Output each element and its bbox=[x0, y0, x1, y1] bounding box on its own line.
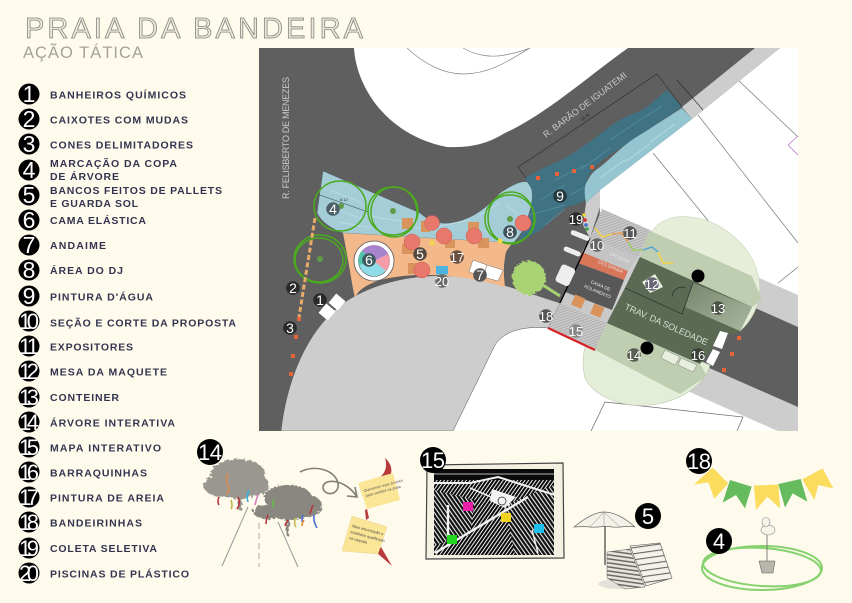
marker 10: 10 bbox=[590, 238, 604, 253]
legend item 6 bbox=[18, 207, 146, 233]
site plan bbox=[259, 48, 798, 440]
curved arrow bbox=[300, 468, 357, 497]
legend item 5: E GUARDA SOL bbox=[50, 198, 139, 210]
legend item 18: BANDEIRINHAS bbox=[50, 518, 142, 530]
section: calcada: CALÇADA bbox=[609, 251, 630, 264]
legend item 14: ÁRVORE INTERATIVA bbox=[50, 416, 175, 430]
tree trunks bbox=[640, 270, 704, 354]
diagonal sidewalk bbox=[682, 48, 780, 119]
map east blocks bbox=[505, 485, 554, 555]
legend item 16 bbox=[18, 460, 147, 485]
marker 3 bbox=[283, 320, 297, 336]
legend item 17: 17 bbox=[19, 485, 39, 510]
pallet stack bbox=[607, 549, 645, 589]
purple mark bbox=[788, 136, 798, 155]
marker 7 bbox=[473, 267, 487, 283]
badge 5: 5 bbox=[642, 504, 654, 529]
legend item 4: 4 bbox=[23, 157, 36, 183]
canopy over road bbox=[607, 257, 752, 364]
badge 15: 15 bbox=[421, 448, 445, 473]
lower lot outline bbox=[591, 402, 743, 431]
marker 6 bbox=[362, 252, 376, 268]
lot lines bbox=[653, 80, 798, 283]
marker 17: 17 bbox=[450, 250, 464, 265]
note 1 bbox=[358, 473, 403, 509]
legend item 17: PINTURA DE AREIA bbox=[50, 492, 164, 504]
chemical toilets bbox=[319, 294, 345, 320]
legend item 1: BANHEIROS QUÍMICOS bbox=[50, 88, 186, 102]
legend item 10: 10 bbox=[19, 309, 39, 334]
note 2: mobiliário qualificado bbox=[350, 530, 385, 543]
bunting flags bbox=[694, 468, 833, 510]
marker 13: 13 bbox=[711, 301, 725, 316]
canopy over south sidewalk bbox=[595, 323, 707, 394]
legend item 1 bbox=[18, 81, 186, 107]
white block right bbox=[590, 48, 798, 431]
barao dimension line: 16,32 bbox=[580, 111, 591, 122]
legend item 2: 2 bbox=[23, 106, 35, 132]
magenta pin bbox=[463, 502, 473, 511]
road label Soledade: TRAV. DA SOLEDADE bbox=[623, 302, 709, 347]
marker 14: 14 bbox=[627, 348, 641, 363]
central island sidewalk bbox=[281, 276, 560, 431]
map west blocks bbox=[434, 490, 475, 545]
legend item 8: 8 bbox=[23, 257, 35, 283]
shadow bbox=[598, 579, 638, 589]
tree crown marking illustration bbox=[702, 518, 822, 590]
barao dimension line bbox=[518, 74, 703, 178]
legend item 13: 13 bbox=[19, 385, 39, 410]
crown dimension line: 8,12 bbox=[340, 197, 349, 202]
exhibitors line bbox=[595, 228, 673, 263]
legend item 4: MARCAÇÃO DA COPA bbox=[50, 157, 177, 170]
legend item 7: 7 bbox=[23, 232, 35, 258]
legend item 12: MESA DA MAQUETE bbox=[50, 366, 167, 378]
note 2: na calçada bbox=[349, 536, 368, 545]
legend item 5: 5 bbox=[23, 182, 35, 208]
badge 4 bbox=[706, 528, 732, 554]
legend item 15: MAPA INTERATIVO bbox=[50, 442, 161, 454]
legend item 13 bbox=[18, 385, 119, 410]
legend item 12 bbox=[18, 359, 167, 384]
legend item 6: 6 bbox=[23, 207, 35, 233]
collection bins bbox=[582, 213, 589, 231]
legend item 15: 15 bbox=[19, 435, 39, 460]
section: ciclofaixa bbox=[578, 252, 628, 280]
interactive tree illustration bbox=[204, 459, 322, 567]
section: caixa de rolamento: CAIXA DE bbox=[590, 279, 611, 292]
crates line bbox=[299, 218, 315, 317]
pole bbox=[604, 515, 606, 565]
canopy bbox=[574, 512, 635, 527]
legend item 11: EXPOSITORES bbox=[50, 342, 133, 354]
marker 16: 16 bbox=[691, 348, 705, 363]
cross-section figures bbox=[555, 229, 590, 287]
pallets bbox=[402, 218, 489, 274]
legend item 8 bbox=[18, 257, 123, 283]
green oval bbox=[702, 544, 822, 590]
marker 19: 19 bbox=[569, 212, 583, 227]
section: hatched sidewalk bbox=[590, 209, 650, 257]
yellow markers bbox=[430, 238, 502, 246]
legend item 10 bbox=[18, 309, 236, 334]
marker 4: 4 bbox=[329, 201, 337, 217]
sapling crown bbox=[761, 518, 775, 535]
map park bbox=[490, 489, 516, 508]
legend item 20: 20 bbox=[19, 561, 39, 586]
badge 4: 4 bbox=[713, 529, 725, 554]
travessa road bbox=[607, 257, 798, 407]
yellow pin bbox=[501, 513, 511, 522]
cones on water bbox=[536, 165, 594, 180]
marker 7: 7 bbox=[476, 267, 484, 283]
legend item 18: 18 bbox=[19, 510, 39, 535]
marker 15: 15 bbox=[569, 324, 583, 339]
marker 8 bbox=[503, 224, 517, 240]
legend item 12: 12 bbox=[19, 359, 39, 384]
legend item 19: COLETA SELETIVA bbox=[50, 543, 157, 555]
section: calcada bbox=[582, 238, 638, 271]
legend item 3: CONES DELIMITADORES bbox=[50, 140, 193, 152]
model table bbox=[642, 274, 663, 293]
badge 14: 14 bbox=[198, 440, 222, 465]
legend item 11: 11 bbox=[19, 334, 39, 359]
tree canopy north bbox=[640, 217, 760, 331]
legend item 9: PINTURA D'ÁGUA bbox=[50, 290, 153, 304]
legend item 9: 9 bbox=[23, 283, 35, 309]
marker 9: 9 bbox=[556, 188, 564, 204]
stage tents bbox=[469, 260, 503, 281]
tree crown 2 bbox=[253, 485, 322, 536]
map top band bbox=[434, 469, 554, 480]
tree crown markings bbox=[294, 181, 535, 283]
water light left bbox=[317, 171, 532, 243]
note 1: para sombra na praia bbox=[365, 485, 402, 498]
legend item 2 bbox=[18, 106, 188, 132]
water light band bbox=[585, 108, 692, 203]
marker 6: 6 bbox=[365, 252, 373, 268]
section: pallets on sidewalk bbox=[571, 294, 604, 318]
booths south bbox=[661, 350, 697, 372]
sapling stem bbox=[766, 533, 768, 562]
legend item 4 bbox=[18, 157, 177, 183]
legend item 16: 16 bbox=[19, 460, 39, 485]
section: ciclofaixa: CICLOFAIXA bbox=[597, 259, 624, 274]
legend item 9 bbox=[18, 283, 153, 309]
orange plaza bbox=[343, 233, 513, 298]
street lines bbox=[222, 507, 298, 567]
tree crown 1 bbox=[204, 459, 269, 510]
section: caixa de rolamento: ROLAMENTO bbox=[584, 284, 612, 300]
legend item 18 bbox=[18, 510, 142, 535]
dark water bbox=[518, 90, 682, 241]
cones west bbox=[289, 317, 301, 376]
map roads bbox=[434, 474, 555, 553]
legend item 3 bbox=[18, 131, 193, 157]
plastic pool bbox=[436, 266, 448, 274]
legend item 4: DE ÁRVORE bbox=[50, 170, 119, 183]
red flag line bbox=[548, 328, 595, 350]
marker 5 bbox=[413, 246, 427, 262]
badge 5 bbox=[635, 503, 661, 529]
canopy over north sidewalk bbox=[640, 230, 762, 307]
red ribbon bbox=[365, 458, 392, 566]
street center dashed bbox=[258, 523, 260, 567]
interactive map strip bbox=[548, 303, 607, 350]
cones east bbox=[722, 336, 741, 372]
white lower lot bbox=[453, 328, 592, 431]
marker 1 bbox=[313, 292, 327, 308]
legend item 11 bbox=[18, 334, 133, 359]
marker 18: 18 bbox=[539, 309, 553, 324]
badge 18: 18 bbox=[687, 449, 711, 474]
contour lines bbox=[407, 48, 530, 74]
crown dimension line bbox=[317, 194, 368, 212]
travessa sidewalks bbox=[560, 209, 798, 440]
ribbons bbox=[218, 473, 317, 528]
legend item 19 bbox=[18, 536, 157, 561]
subtitle: AÇÃO TÁTICA bbox=[23, 42, 143, 62]
legend item 13: CONTEINER bbox=[50, 392, 119, 404]
legend item 14: 14 bbox=[19, 410, 39, 435]
marker 4 bbox=[326, 201, 340, 217]
green seedlings bbox=[317, 203, 513, 262]
corner sidewalk bbox=[583, 190, 600, 238]
booths east bbox=[706, 331, 728, 366]
marker 1: 1 bbox=[316, 292, 324, 308]
canopy ribs bbox=[590, 512, 620, 527]
marker 3: 3 bbox=[286, 320, 294, 336]
water texture dark bbox=[530, 106, 662, 225]
legend item 15 bbox=[18, 435, 161, 460]
tree canopy south bbox=[582, 340, 710, 406]
marker 9 bbox=[553, 188, 567, 204]
legend item 7: ANDAIME bbox=[50, 240, 106, 252]
legend item 16: BARRAQUINHAS bbox=[50, 468, 147, 480]
road base bbox=[259, 48, 798, 431]
sticky notes bbox=[342, 458, 403, 566]
marker 11: 11 bbox=[623, 226, 637, 241]
section black line bbox=[560, 238, 590, 303]
marker 8: 8 bbox=[506, 224, 514, 240]
plan numbers bbox=[283, 188, 725, 363]
legend item 8: ÁREA DO DJ bbox=[50, 264, 123, 277]
green pin bbox=[447, 535, 457, 544]
legend item 20: PISCINAS DE PLÁSTICO bbox=[50, 568, 189, 580]
water texture left bbox=[325, 190, 520, 229]
cyan pin bbox=[534, 524, 544, 533]
section: caixa de rolamento bbox=[565, 263, 624, 310]
legend item 5 bbox=[18, 182, 222, 210]
marker 12: 12 bbox=[645, 277, 659, 292]
legend bbox=[18, 81, 236, 586]
marker 5: 5 bbox=[416, 246, 424, 262]
legend item 2: CAIXOTES COM MUDAS bbox=[50, 114, 188, 126]
map base bbox=[434, 469, 554, 555]
legend item 10: SEÇÃO E CORTE DA PROPOSTA bbox=[50, 316, 236, 330]
water light band texture bbox=[600, 124, 675, 178]
trampoline bbox=[354, 241, 394, 281]
legend item 19: 19 bbox=[19, 536, 39, 561]
legend item 5: BANCOS FEITOS DE PALLETS bbox=[50, 185, 222, 197]
legend item 7 bbox=[18, 232, 106, 258]
legend item 17 bbox=[18, 485, 164, 510]
pallet bench with umbrella illustration bbox=[574, 512, 672, 589]
legend item 1: 1 bbox=[23, 81, 35, 107]
sapling pot bbox=[759, 561, 775, 573]
legend item 6: CAMA ELÁSTICA bbox=[50, 214, 146, 227]
marker 2: 2 bbox=[289, 280, 297, 296]
tree bbox=[512, 261, 560, 296]
note 2 bbox=[342, 516, 387, 554]
umbrellas bbox=[404, 215, 531, 278]
note 1: Queremos mais árvores bbox=[363, 479, 403, 493]
map frame bbox=[426, 463, 564, 559]
legend item 3: 3 bbox=[23, 131, 35, 157]
marker 2 bbox=[286, 280, 300, 296]
road label Felisberto: R. FELISBERTO DE MENEZES bbox=[281, 77, 291, 199]
interactive map illustration bbox=[426, 463, 564, 559]
section: lower sidewalk bbox=[566, 292, 612, 323]
note 2: Mais arborização e bbox=[352, 524, 384, 536]
marker 20: 20 bbox=[435, 274, 449, 289]
legend item 20 bbox=[18, 561, 189, 586]
title: PRAIA DA BANDEIRA bbox=[25, 13, 364, 45]
container 13 area bbox=[685, 283, 752, 331]
legend item 14 bbox=[18, 410, 175, 435]
leaning pallet bbox=[630, 543, 672, 586]
road label Barao: R. BARÃO DE IGUATEMI bbox=[541, 70, 629, 140]
dimension lines bbox=[625, 283, 693, 314]
white block top bbox=[354, 48, 628, 147]
